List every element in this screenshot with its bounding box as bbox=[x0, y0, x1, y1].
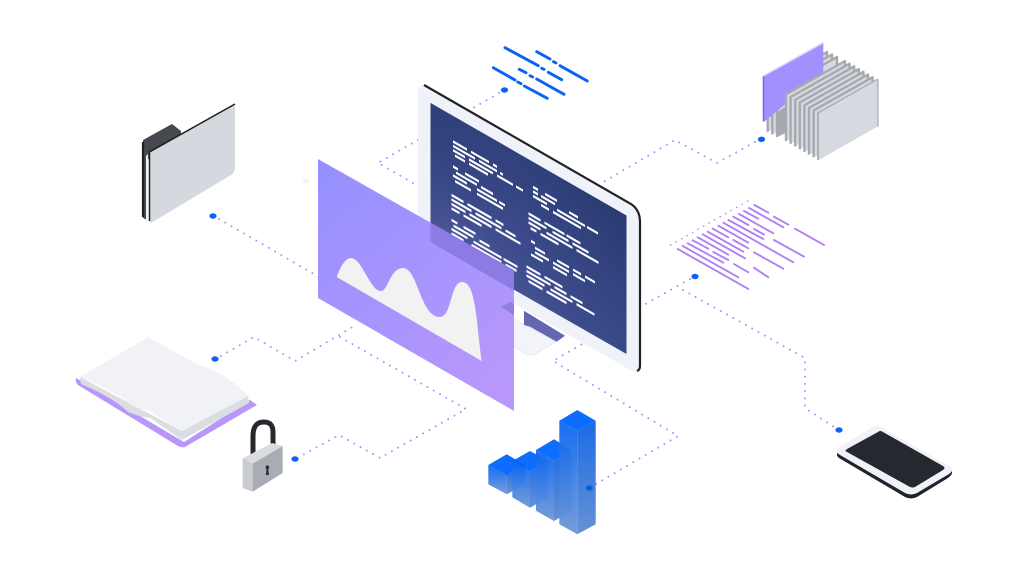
bar chart bbox=[488, 410, 596, 534]
bar 2 bbox=[512, 451, 548, 508]
purple sheet bbox=[763, 43, 823, 122]
icon: blue data lines bbox=[493, 48, 587, 98]
icon: server stack bbox=[763, 43, 877, 160]
front slabs bbox=[786, 61, 845, 141]
icon: folder bbox=[143, 104, 235, 223]
icon: purple document lines bbox=[671, 201, 824, 289]
bar 1 bbox=[488, 454, 525, 494]
stand slot bbox=[524, 311, 565, 342]
monitor screen bbox=[430, 103, 626, 354]
icon: open book bbox=[76, 337, 257, 447]
back slabs bbox=[768, 52, 827, 132]
code text lines bbox=[452, 142, 598, 319]
area chart bbox=[337, 258, 482, 361]
monitor body bbox=[418, 85, 641, 371]
connector lines bbox=[219, 93, 834, 484]
icon: padlock bbox=[243, 422, 283, 492]
stand notch seen through panel bbox=[501, 302, 514, 316]
bar connector dot bbox=[586, 485, 593, 491]
faint marker bbox=[302, 178, 310, 184]
icon: tablet bbox=[836, 426, 952, 498]
bar 4 bbox=[559, 410, 596, 534]
icon: monitor bbox=[418, 85, 641, 371]
monitor stand bbox=[512, 318, 556, 355]
bar 3 bbox=[536, 439, 572, 521]
screen seen through panel bbox=[430, 222, 514, 290]
monitor dark edge bbox=[424, 85, 640, 371]
connector end dots bbox=[209, 87, 843, 462]
panel: purple chart bbox=[318, 159, 514, 411]
